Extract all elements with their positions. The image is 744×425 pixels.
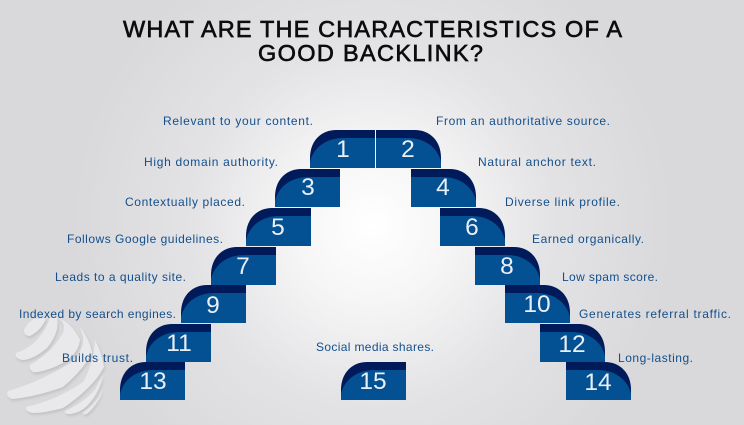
item 6: 6 (465, 214, 479, 241)
item 15 (316, 340, 434, 400)
item 11 (19, 307, 211, 362)
item 14 (566, 351, 693, 400)
item 15: Social media shares. (316, 340, 434, 354)
title: GOOD BACKLINK? (258, 40, 483, 66)
item 7 (67, 232, 276, 285)
item 6 (440, 195, 620, 246)
item 4 (411, 155, 596, 207)
item 2: From an authoritative source. (436, 114, 610, 128)
item 5: Contextually placed. (125, 195, 245, 209)
item 6: Diverse link profile. (505, 195, 620, 209)
item 5: 5 (271, 214, 285, 241)
item 3: 3 (301, 174, 315, 201)
item 10 (505, 270, 658, 323)
item 4: 4 (436, 174, 450, 201)
item 14: Long-lasting. (618, 351, 693, 365)
item 13 (62, 351, 185, 400)
item 9 (55, 270, 246, 323)
title (123, 16, 622, 66)
item 3: High domain authority. (144, 155, 278, 169)
item 11: Indexed by search engines. (19, 307, 176, 321)
item 7: Follows Google guidelines. (67, 232, 223, 246)
item 1: 1 (336, 136, 350, 163)
item 10: 10 (523, 291, 551, 318)
item 5 (125, 195, 311, 246)
item 9: Leads to a quality site. (55, 270, 186, 284)
item 8 (475, 232, 644, 285)
item 12: 12 (558, 331, 586, 358)
item 7: 7 (236, 253, 250, 280)
item 12: Generates referral traffic. (579, 307, 731, 321)
item 8: 8 (500, 253, 514, 280)
item 1: Relevant to your content. (163, 114, 313, 128)
item 15: 15 (359, 368, 387, 395)
item 1 (163, 114, 375, 168)
icon: globe watermark (7, 318, 104, 414)
item 12 (540, 307, 731, 362)
item 3 (144, 155, 340, 207)
item 11: 11 (166, 330, 192, 357)
title: WHAT ARE THE CHARACTERISTICS OF A (123, 16, 622, 42)
item 8: Earned organically. (532, 232, 644, 246)
item 9: 9 (206, 292, 220, 319)
item 10: Low spam score. (562, 270, 658, 284)
item 2: 2 (401, 136, 415, 163)
item 14: 14 (584, 369, 612, 396)
item 4: Natural anchor text. (478, 155, 596, 169)
item 13: 13 (139, 368, 167, 395)
item 13: Builds trust. (62, 351, 133, 365)
item 2 (376, 114, 610, 168)
